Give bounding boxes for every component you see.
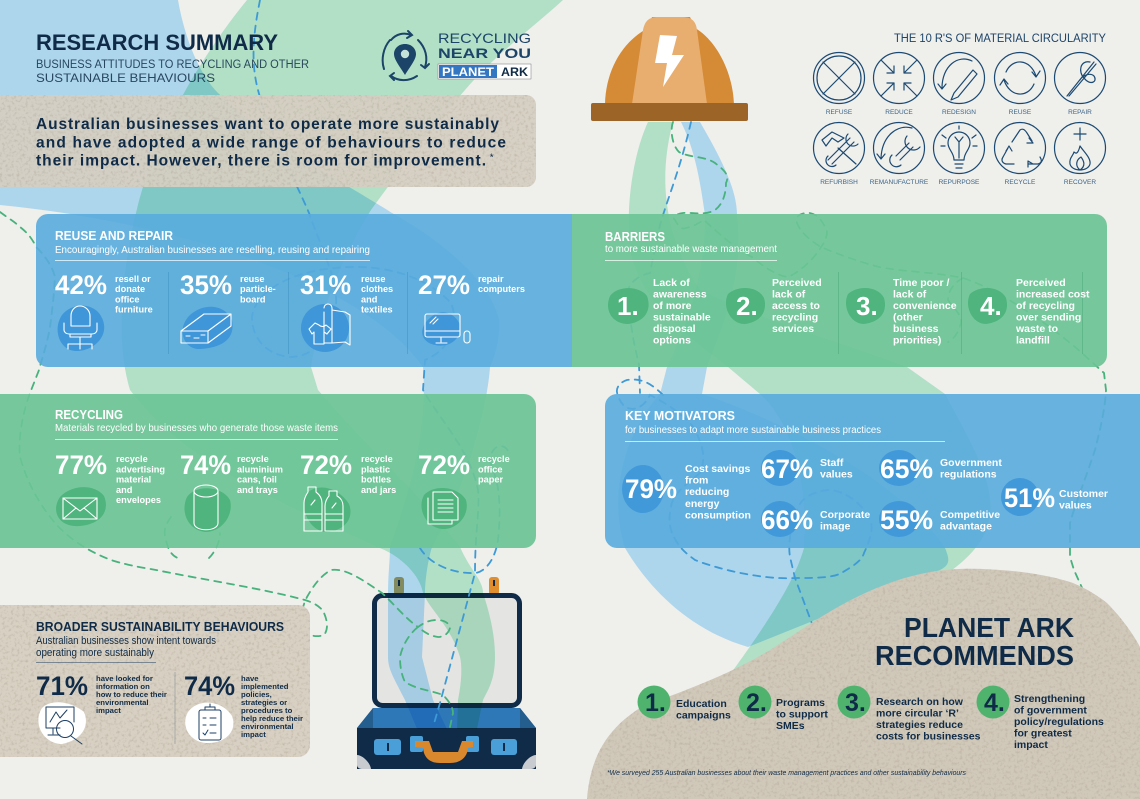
stat: 77%: 77% xyxy=(55,450,107,480)
icon: clothes and textiles xyxy=(301,304,350,352)
recommendation 2 xyxy=(738,686,828,732)
icon: refuse xyxy=(814,52,864,116)
stat: 79%: Cost savings xyxy=(685,463,751,475)
stat: 66%: image xyxy=(820,520,851,532)
recommendation 4: impact xyxy=(1014,739,1048,751)
recommendation 4: Strengthening xyxy=(1014,693,1085,705)
icon: repurpose xyxy=(934,122,984,186)
stat: 74%: impact xyxy=(241,730,266,739)
stat: 67%: Staff xyxy=(820,457,844,469)
stat: 74%: strategies or xyxy=(241,698,287,707)
subheading: broader: operating more sustainably xyxy=(36,647,154,659)
barrier 4: over sending xyxy=(1016,312,1081,324)
icon: office chair xyxy=(58,306,104,351)
logo: Recycling Near You xyxy=(383,30,531,80)
icon: hard hat xyxy=(591,17,748,121)
icon: repurpose: REPURPOSE xyxy=(939,179,980,186)
stat: 74%: help reduce their xyxy=(241,714,303,723)
panel: broader sustainability behaviours xyxy=(0,605,310,757)
recommendation 3: costs for businesses xyxy=(876,730,981,742)
stat: 77%: recycle xyxy=(116,454,148,464)
stat: 74%: implemented xyxy=(241,682,289,691)
heading: broader: BROADER SUSTAINABILITY BEHAVIOURS xyxy=(36,620,284,634)
stat: 72% paper xyxy=(418,450,510,485)
panel: reuse and repair xyxy=(36,214,572,367)
stone band: intro xyxy=(0,95,536,187)
icon: remanufacture: REMANUFACTURE xyxy=(870,179,929,186)
barrier 2: Perceived xyxy=(772,277,822,289)
icon: redesign: REDESIGN xyxy=(942,109,976,116)
icon: particle board xyxy=(181,307,233,349)
stat: 35%: 35% xyxy=(180,270,232,300)
recommendation 3: more circular ‘R’ xyxy=(876,708,959,720)
stat: 35%: reuse xyxy=(240,274,265,284)
barrier 1: awareness xyxy=(653,288,707,300)
intro statement: * xyxy=(487,152,494,164)
stat: 42%: office xyxy=(115,294,140,304)
barrier 2: access to xyxy=(772,300,820,312)
icon: envelope xyxy=(56,487,106,526)
icon: reuse: REUSE xyxy=(1009,109,1032,116)
barrier 3: 3. xyxy=(856,291,878,321)
stat: 72% plastic: recycle xyxy=(361,454,393,464)
barrier 1: options xyxy=(653,334,691,346)
barrier 1 xyxy=(608,277,711,346)
intro statement: their impact. However, there is room for improvement. xyxy=(36,152,486,170)
logo: Recycling Near You: ARK xyxy=(501,67,529,79)
barrier 2: recycling xyxy=(772,312,818,324)
stat: 71%: environmental xyxy=(96,698,149,707)
icon: recycle: RECYCLE xyxy=(1005,179,1036,186)
stat: 79%: reducing xyxy=(685,486,729,498)
stat: 65%: regulations xyxy=(940,468,997,480)
logo: Recycling Near You: PLANET xyxy=(442,67,494,79)
recommendation 4: policy/regulations xyxy=(1014,716,1104,728)
stat: 65%: Government xyxy=(940,457,1002,469)
stat: 77%: and xyxy=(116,485,132,495)
heading: reuse and repair: REUSE AND REPAIR xyxy=(55,229,173,243)
stat: 31%: 31% xyxy=(300,270,351,300)
stat: 79% xyxy=(622,463,751,521)
stat: 71%: have looked for xyxy=(96,674,153,683)
stat: 72% paper: 72% xyxy=(418,450,470,480)
icon: suitcase xyxy=(357,577,536,769)
stat: 74%: 74% xyxy=(184,671,235,701)
stat: 55%: 55% xyxy=(880,505,933,535)
recommendation 4: 4. xyxy=(984,689,1005,717)
barrier 2: services xyxy=(772,323,814,335)
recommendation 3: strategies reduce xyxy=(876,719,963,731)
stat: 27%: computers xyxy=(478,284,525,294)
barrier 4: landfill xyxy=(1016,334,1050,346)
stat: 74%: have xyxy=(241,674,259,683)
stat: 72% plastic xyxy=(300,450,396,495)
barrier 3 xyxy=(846,277,957,346)
stat: 35%: board xyxy=(240,294,266,304)
stat: 65%: 65% xyxy=(880,454,933,484)
stat: 72% plastic: 72% xyxy=(300,450,352,480)
recommendation 3: 3. xyxy=(845,689,866,717)
stat: 74%: procedures to xyxy=(241,706,293,715)
recommendation 2: SMEs xyxy=(776,720,805,732)
stat: 71%: impact xyxy=(96,706,121,715)
stat: 42%: resell or xyxy=(115,274,151,284)
stat: 42%: 42% xyxy=(55,270,107,300)
icon: magnifier chart xyxy=(38,702,86,744)
recommendation 4: of government xyxy=(1014,704,1087,716)
recommendation 2: Programs xyxy=(776,697,825,709)
stat: 79%: energy xyxy=(685,498,720,510)
recommendation 3: Research on how xyxy=(876,696,964,708)
icon: recover: RECOVER xyxy=(1064,179,1096,186)
stat: 35%: particle- xyxy=(240,284,276,294)
stat: 72% paper: paper xyxy=(478,475,503,485)
recommendation 3 xyxy=(838,686,981,742)
stat: 74%: aluminium xyxy=(237,464,283,474)
heading: barriers: BARRIERS xyxy=(605,230,665,244)
icon: computer xyxy=(422,312,470,346)
subheading: for businesses to adapt more sustainable business practices xyxy=(625,425,881,436)
stat: 51%: Customer xyxy=(1059,488,1108,500)
stat: 74%: and trays xyxy=(237,485,278,495)
stat: 42%: donate xyxy=(115,284,145,294)
icon: can xyxy=(184,485,231,532)
icon: refuse: REFUSE xyxy=(826,109,853,116)
recommendation 4: for greatest xyxy=(1014,728,1072,740)
barrier 1: disposal xyxy=(653,323,696,335)
stat: 31%: clothes xyxy=(361,284,393,294)
subheading: Materials recycled by businesses who generate those waste items xyxy=(55,422,338,434)
subheading: broader: Australian businesses show intent towards xyxy=(36,635,216,647)
icon: refurbish xyxy=(814,122,864,186)
stat: 55% xyxy=(879,501,1000,537)
barrier 2: lack of xyxy=(772,288,806,300)
10 Rs heading: THE 10 R'S OF MATERIAL CIRCULARITY xyxy=(894,33,1106,45)
barrier 4: 4. xyxy=(980,291,1002,321)
icon: reduce: REDUCE xyxy=(885,109,913,116)
barrier 3: (other xyxy=(893,312,923,324)
subheading: to more sustainable waste management xyxy=(605,244,777,255)
barrier 4 xyxy=(968,277,1090,346)
stat: 55%: advantage xyxy=(940,520,992,532)
stat: 71%: 71% xyxy=(36,671,88,701)
barrier 3: convenience xyxy=(893,300,957,312)
stat: 35% xyxy=(180,270,276,304)
barrier 3: lack of xyxy=(893,288,927,300)
panel: barriers xyxy=(572,214,1107,367)
stat: 72% plastic: and jars xyxy=(361,485,396,495)
panel: recycling xyxy=(0,394,536,548)
stat: 67%: values xyxy=(820,468,853,480)
stat: 66%: Corporate xyxy=(820,509,870,521)
stat: 66% xyxy=(761,501,870,537)
barrier 4: waste to xyxy=(1015,323,1058,335)
stat: 77%: advertising xyxy=(116,464,165,474)
icon: repair xyxy=(1054,52,1106,116)
stat: 71%: how to reduce their xyxy=(96,690,167,699)
stat: 74%: policies, xyxy=(241,690,272,699)
heading: recycling: RECYCLING xyxy=(55,408,123,422)
stat: 72% paper: office xyxy=(478,464,503,474)
stat: 67% xyxy=(761,450,853,486)
logo: Recycling Near You: NEAR YOU xyxy=(438,45,531,61)
barrier 2: 2. xyxy=(736,291,758,321)
barrier 3: Time poor / xyxy=(893,277,949,289)
icon: reuse xyxy=(994,52,1046,116)
intro statement: and have adopted a wide range of behaviours to reduce xyxy=(36,134,506,152)
intro statement: Australian businesses want to operate more sustainably xyxy=(36,116,499,133)
barrier 1: of more xyxy=(653,300,692,312)
barrier 4: Perceived xyxy=(1016,277,1066,289)
subtitle: BUSINESS ATTITUDES TO RECYCLING AND OTHER xyxy=(36,59,309,71)
icon: refurbish: REFURBISH xyxy=(820,179,858,186)
icon: repair: REPAIR xyxy=(1068,109,1092,116)
logo: Recycling Near You: RECYCLING xyxy=(438,30,531,46)
recommendation 1 xyxy=(638,686,731,722)
stat: 51%: values xyxy=(1059,499,1092,511)
stat: 74% xyxy=(184,671,303,739)
subheading: Encouragingly, Australian businesses are reselling, reusing and repairing xyxy=(55,244,370,256)
stat: 51% xyxy=(1001,478,1108,516)
icon: reduce xyxy=(874,52,924,116)
icon: redesign xyxy=(934,52,984,116)
icon: recover xyxy=(1054,122,1106,186)
panel: Planet Ark recommends xyxy=(587,569,1140,799)
stat: 31%: textiles xyxy=(361,305,393,315)
recommendation 4 xyxy=(976,686,1104,751)
stat: 74%: cans, foil xyxy=(237,475,277,485)
panel: Planet Ark recommends: RECOMMENDS xyxy=(875,640,1074,671)
stat: 31%: and xyxy=(361,294,377,304)
title: RESEARCH SUMMARY xyxy=(36,30,278,55)
stat: 72% paper: recycle xyxy=(478,454,510,464)
icon: bottles xyxy=(304,487,350,532)
recommendation 2: 2. xyxy=(746,689,767,717)
stat: 77% xyxy=(55,450,165,505)
heading: Planet Ark recommends: PLANET ARK xyxy=(904,612,1074,643)
stat: 72% plastic: bottles xyxy=(361,475,391,485)
icon: recycle xyxy=(994,122,1046,186)
barrier 4: of recycling xyxy=(1016,300,1075,312)
icon: remanufacture xyxy=(870,122,929,186)
stat: 72% plastic: plastic xyxy=(361,464,390,474)
recommendation 1: 1. xyxy=(645,689,666,717)
barrier 1: Lack of xyxy=(653,277,690,289)
stat: 27%: repair xyxy=(478,274,504,284)
barrier 1: sustainable xyxy=(653,312,711,324)
recommendation 1: Education xyxy=(676,698,727,710)
stat: 79%: 79% xyxy=(625,474,677,504)
stat: 79%: from xyxy=(685,475,708,487)
stat: 31% xyxy=(300,270,393,315)
panel: key motivators xyxy=(605,394,1140,548)
recommendation 2: to support xyxy=(776,708,828,720)
stat: 79%: consumption xyxy=(685,509,751,521)
barrier 4: increased cost xyxy=(1016,288,1090,300)
recommendation 1: campaigns xyxy=(676,710,731,722)
icon: paper xyxy=(421,488,467,529)
stat: 74%: environmental xyxy=(241,722,294,731)
footnote: *We surveyed 255 Australian businesses about their waste management practices and other sustainability behaviours xyxy=(607,770,966,777)
heading: key motivators: KEY MOTIVATORS xyxy=(625,409,735,423)
stat: 55%: Competitive xyxy=(940,509,1000,521)
stat: 74% xyxy=(180,450,283,495)
stat: 27%: 27% xyxy=(418,270,470,300)
stat: 31%: reuse xyxy=(361,274,386,284)
stat: 77%: material xyxy=(116,475,151,485)
barrier 3: priorities) xyxy=(893,334,941,346)
stat: 27% xyxy=(418,270,525,300)
stat: 74%: 74% xyxy=(180,450,231,480)
stat: 71% xyxy=(36,671,167,715)
stat: 42% xyxy=(55,270,153,315)
barrier 3: business xyxy=(893,323,939,335)
stat: 66%: 66% xyxy=(761,505,813,535)
stat: 71%: information on xyxy=(96,682,150,691)
barrier 1: 1. xyxy=(617,291,639,321)
icons: 10 Rs grid xyxy=(814,52,1106,186)
icon: clipboard xyxy=(185,703,233,743)
stat: 51%: 51% xyxy=(1004,483,1055,513)
background ribbons xyxy=(0,0,990,729)
stat: 42%: furniture xyxy=(115,305,153,315)
subtitle: SUSTAINABLE BEHAVIOURS xyxy=(36,73,215,85)
barrier 2 xyxy=(726,277,822,335)
stat: 67%: 67% xyxy=(761,454,813,484)
stat: 65% xyxy=(879,450,1002,486)
stat: 74%: recycle xyxy=(237,454,269,464)
stat: 77%: envelopes xyxy=(116,495,161,505)
